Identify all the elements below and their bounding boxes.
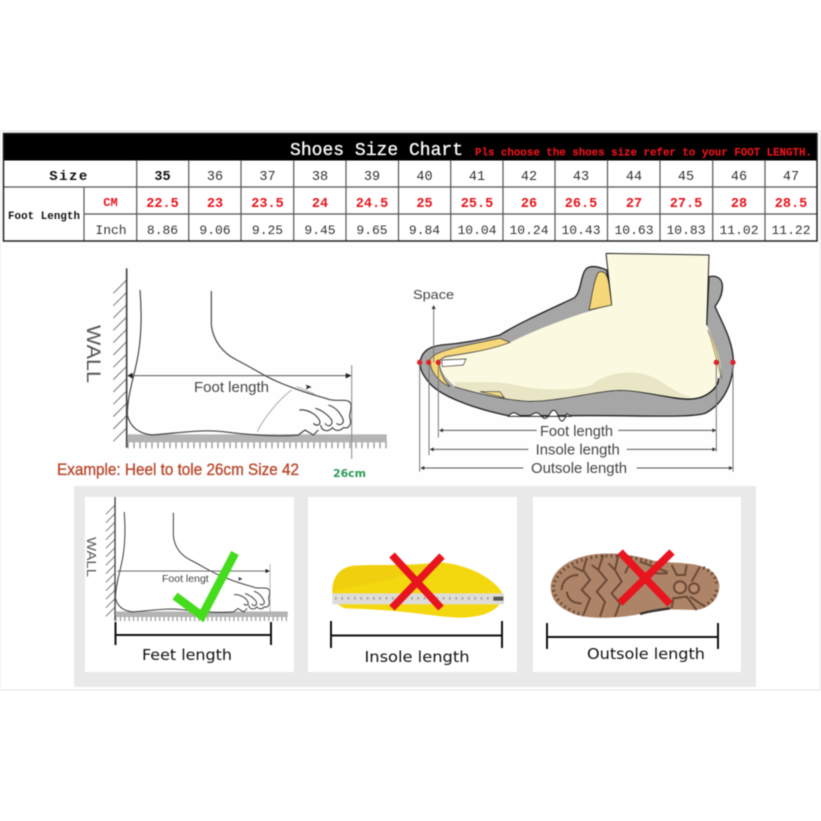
row: foot length in inches: 10.24 (509, 223, 549, 238)
row: size: 41 (469, 170, 485, 185)
row: foot length in inches: 9.25 (252, 223, 283, 238)
row: foot length in inches: 9.06 (199, 223, 231, 238)
row: size: 47 (783, 170, 799, 185)
red instruction note: Pls choose the shoes size refer to your FOOT LENGTH. (475, 148, 812, 160)
icon: green check mark (175, 553, 235, 616)
row: foot length in inches: 10.63 (614, 223, 654, 238)
size chart table (3, 133, 817, 241)
row: foot length in cm: 26 (521, 197, 537, 212)
label: foot length: Foot length (540, 424, 613, 440)
card: outsole length (533, 497, 741, 672)
row: foot length in cm: 24 (312, 197, 328, 212)
diagram: shoe cross-section (417, 253, 736, 472)
row: size: 46 (731, 170, 747, 185)
row: size: 35 (154, 170, 171, 185)
sole tread (508, 410, 572, 421)
label: wall: WALL (82, 325, 103, 383)
row: foot length in inches: 9.84 (409, 223, 440, 238)
row: foot length in inches: 11.22 (771, 223, 811, 238)
label: insole length: Insole length (536, 442, 620, 458)
row: foot length in cm: 25 (416, 197, 433, 212)
label: wall: WALL (84, 537, 99, 577)
measurement points (417, 360, 736, 365)
row: foot length in cm: 22.5 (146, 197, 179, 212)
yellow padding (589, 272, 612, 310)
row: foot length in cm: 28 (731, 197, 747, 212)
row: foot length in inches: 10.83 (666, 223, 706, 238)
card: feet length (84, 497, 294, 672)
bottom comparison panel (74, 486, 756, 687)
row: foot length in inches: 9.45 (304, 223, 336, 238)
measure bracket (116, 622, 271, 645)
row: foot length in inches (95, 223, 811, 238)
outsole photo (551, 554, 719, 618)
dimension lines (420, 308, 733, 472)
measure bracket (331, 621, 502, 648)
icon: red cross (620, 552, 672, 604)
icon: red cross (392, 555, 442, 608)
row label: foot length: Foot Length (8, 211, 80, 223)
row: foot length in cm: 23 (207, 197, 223, 212)
caption: Insole length (364, 648, 470, 666)
row: size (49, 169, 799, 185)
label: 26cm: 26cm (333, 467, 366, 480)
row: size: 45 (678, 170, 694, 185)
label: space: Space (413, 287, 454, 302)
row: size: 39 (364, 170, 380, 185)
row: size: 36 (207, 170, 223, 185)
example caption: Example: Heel to tole 26cm Size 42 (57, 460, 299, 479)
row: foot length in inches: 10.04 (457, 223, 497, 238)
row: size: 37 (259, 170, 276, 185)
row: size: 43 (573, 170, 589, 185)
foot (440, 253, 721, 401)
label: foot length: Foot length (194, 379, 269, 396)
row: foot length in inches: 11.02 (719, 223, 759, 238)
row: foot length in cm: CM (103, 196, 118, 210)
row: foot length in cm: 28.5 (775, 197, 807, 212)
caption: Outsole length (587, 645, 705, 663)
shoe body (420, 267, 733, 416)
label: foot length: Foot lengt (162, 573, 209, 585)
row: foot length in cm (103, 196, 807, 212)
chart title: Shoes Size Chart (290, 141, 463, 161)
row: foot length in cm: 25.5 (461, 197, 493, 212)
table header bar (3, 133, 817, 161)
insole photo (332, 562, 504, 618)
row: foot length in inches: 9.65 (356, 223, 388, 238)
row: foot length in inches: Inch (95, 223, 127, 238)
row: size: 44 (626, 170, 642, 185)
row: size: 38 (312, 170, 328, 185)
row: foot length in cm: 24.5 (356, 197, 388, 212)
row: size: 40 (416, 170, 433, 185)
row: foot length in cm: 23.5 (251, 197, 284, 212)
card: insole length (308, 497, 517, 672)
row: size: Size (49, 169, 89, 185)
toe cap highlight (442, 359, 466, 367)
row: foot length in cm: 26.5 (565, 197, 597, 212)
label: outsole length: Outsole length (531, 461, 627, 477)
caption: Feet length (142, 646, 232, 664)
row: foot length in cm: 27 (626, 197, 642, 212)
row: foot length in cm: 27.5 (670, 197, 702, 212)
diagram: foot against wall (113, 268, 387, 459)
row: size: 42 (521, 170, 537, 185)
row: foot length in inches: 10.43 (561, 223, 601, 238)
small foot drawing (106, 497, 288, 621)
measure bracket (547, 623, 718, 649)
row: foot length in inches: 8.86 (147, 223, 178, 238)
